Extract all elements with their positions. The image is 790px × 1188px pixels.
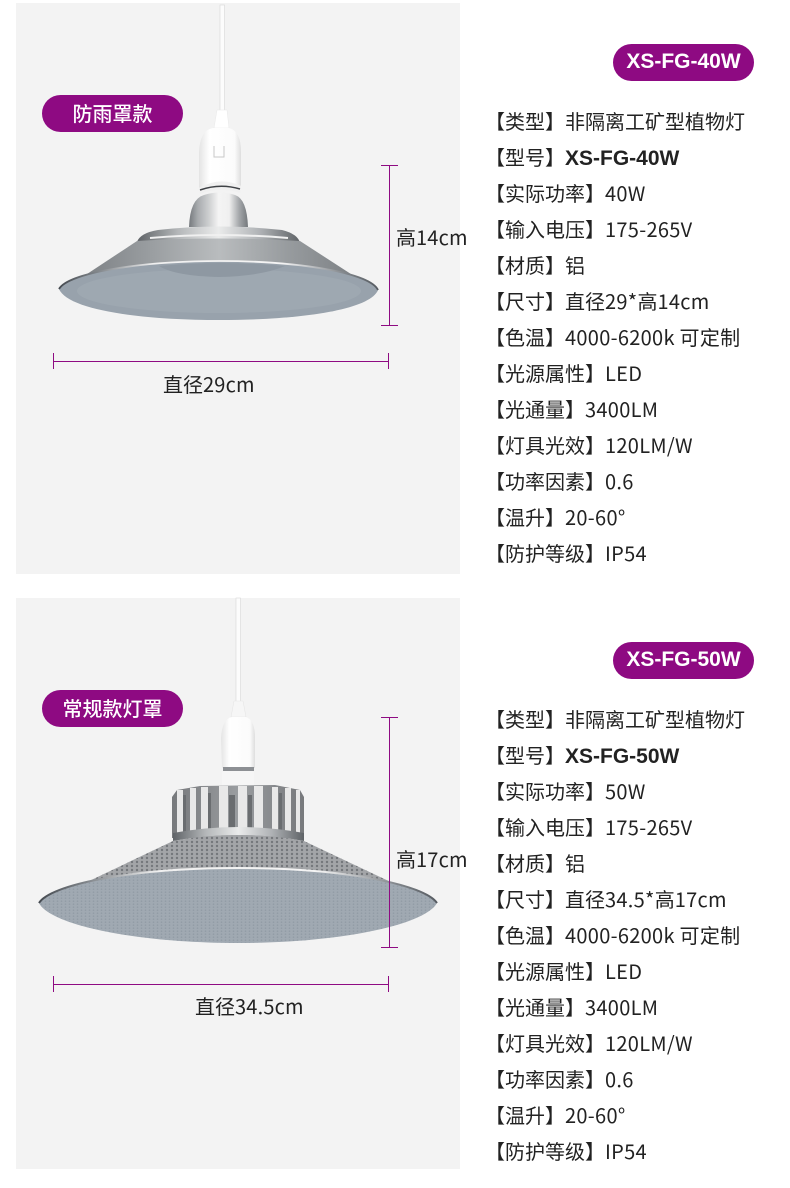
badge: model 40W — [613, 44, 754, 81]
badge: model 50W — [613, 642, 754, 679]
spec list: 50W: 【温升】20-60° — [485, 1100, 626, 1129]
spec list: 50W: 【型号】XS-FG-50W — [485, 740, 679, 769]
spec list: 50W: 【色温】4000-6200k 可定制 — [485, 920, 740, 949]
spec list: 40W: 【灯具光效】120LM/W — [485, 430, 693, 459]
spec list: 50W: 【类型】非隔离工矿型植物灯 — [485, 704, 745, 733]
spec list: 40W: 【类型】非隔离工矿型植物灯 — [485, 106, 745, 135]
spec list: 50W: 【实际功率】50W — [485, 776, 646, 805]
dimension: height 17cm — [381, 718, 398, 948]
spec list: 40W: 【光通量】3400LM — [485, 394, 658, 423]
heat sink fins — [172, 785, 304, 838]
panel: standard lamp background — [16, 598, 460, 1169]
label: height 14cm: 高14cm — [396, 222, 468, 251]
lamp: standard shade — [39, 598, 437, 943]
spec list: 50W: 【输入电压】175-265V — [485, 812, 692, 841]
spec list: 40W: 【防护等级】IP54 — [485, 538, 647, 567]
badge: model 50W: XS-FG-50W — [626, 648, 741, 671]
spec list: 50W: 【尺寸】直径34.5*高17cm — [485, 884, 727, 913]
spec list: 40W — [485, 106, 745, 567]
badge: model 40W: XS-FG-40W — [626, 50, 741, 73]
spec list: 50W: 【灯具光效】120LM/W — [485, 1028, 693, 1057]
dimension: diameter 29cm — [54, 353, 388, 369]
spec list: 40W: 【色温】4000-6200k 可定制 — [485, 322, 740, 351]
spec list: 40W: 【温升】20-60° — [485, 502, 626, 531]
spec list: 40W: 【型号】XS-FG-40W — [485, 142, 679, 171]
label: height 17cm: 高17cm — [396, 844, 468, 873]
spec list: 40W: 【光源属性】LED — [485, 358, 642, 387]
badge: standard style — [42, 690, 183, 727]
spec list: 40W: 【尺寸】直径29*高14cm — [485, 286, 710, 315]
spec list: 50W: 【防护等级】IP54 — [485, 1136, 647, 1165]
spec list: 50W: 【光通量】3400LM — [485, 992, 658, 1021]
badge: standard style: 常规款灯罩 — [62, 693, 162, 722]
dimension: height 14cm — [381, 166, 398, 326]
spec list: 50W: 【光源属性】LED — [485, 956, 642, 985]
label: diameter 29cm: 直径29cm — [163, 369, 255, 398]
spec list: 50W: 【功率因素】0.6 — [485, 1064, 634, 1093]
spec list: 50W: 【材质】铝 — [485, 848, 585, 877]
spec list: 40W: 【材质】铝 — [485, 250, 585, 279]
dimension: diameter 34.5cm — [54, 976, 388, 992]
label: diameter 34.5cm: 直径34.5cm — [195, 991, 304, 1020]
panel: rain-cover lamp background — [16, 3, 460, 574]
spec list: 40W: 【输入电压】175-265V — [485, 214, 692, 243]
spec list: 40W: 【功率因素】0.6 — [485, 466, 634, 495]
lamp: rain-cover shade — [59, 5, 378, 320]
badge: rain cover style — [42, 95, 183, 132]
spec list: 40W: 【实际功率】40W — [485, 178, 646, 207]
badge: rain cover style: 防雨罩款 — [72, 98, 152, 127]
